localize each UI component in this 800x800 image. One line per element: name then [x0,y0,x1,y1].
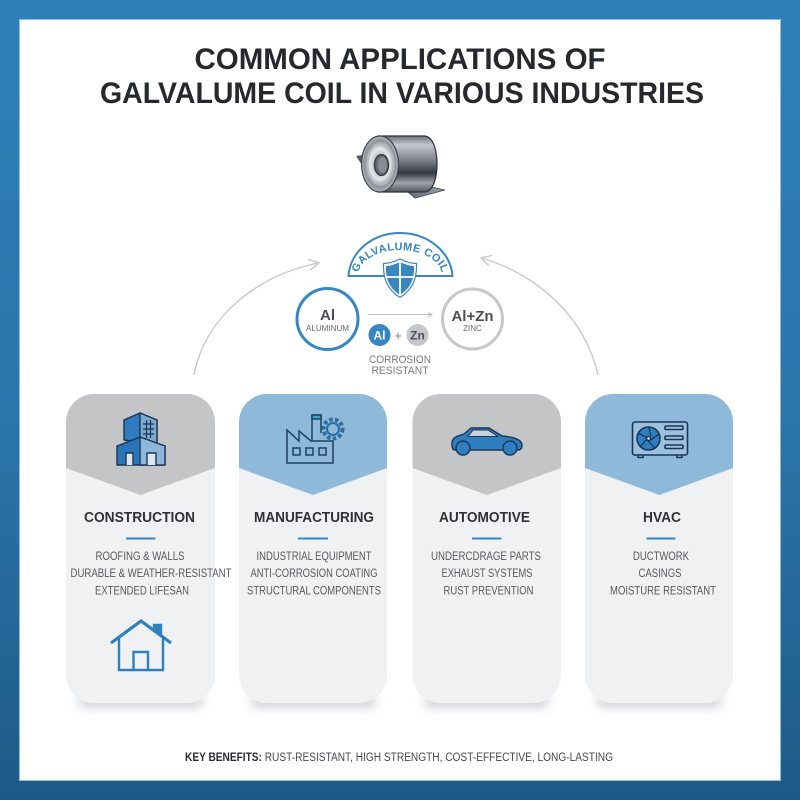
list: ANTI-CORROSION COATING [250,568,378,580]
icon: car [452,428,522,455]
corrosion resistant label: CORROSION [369,354,431,366]
list: INDUSTRIAL EQUIPMENT [256,551,372,563]
list: EXTENDED LIFESAN [95,586,189,598]
key benefits footer: KEY BENEFITS: RUST-RESISTANT, HIGH STRENGTH, COST-EFFECTIVE, LONG-LASTING [185,752,613,764]
list [247,551,381,598]
corrosion resistant label: RESISTANT [372,365,429,377]
list: ROOFING & WALLS [96,551,185,563]
aluminum circle: ALUMINUM [306,324,349,333]
list: STRUCTURAL COMPONENTS [247,586,381,598]
heading: MANUFACTURING [254,510,374,526]
icon: metal coil [356,136,445,198]
list: EXHAUST SYSTEMS [442,568,533,580]
zinc circle: Al+Zn [452,308,494,325]
icon: air conditioner [632,422,688,458]
heading: AUTOMOTIVE [439,510,530,526]
zinc circle [442,289,502,349]
arrow: curved left [194,263,318,375]
list: CASINGS [638,568,682,580]
aluminum circle [297,288,358,350]
icon: factory with gear [287,415,342,463]
alloy formula: Zn [410,328,425,342]
list [610,551,716,598]
list [431,551,541,598]
panel: automotive [412,394,561,708]
title: COMMON APPLICATIONS OF [194,43,606,76]
arrow: curved right [482,258,598,375]
list: DUCTWORK [633,551,689,563]
icon: house [111,621,171,670]
title [100,43,704,110]
galvalume coil badge: GALVALUME COIL [352,242,448,272]
alloy formula: + [394,328,402,343]
heading: HVAC [643,510,681,526]
panel: manufacturing [239,394,387,708]
list: RUST PREVENTION [444,586,534,598]
list [70,551,232,598]
aluminum circle: Al [320,307,335,324]
panel: construction [66,394,232,708]
icon: shield [383,259,417,298]
list: MOISTURE RESISTANT [610,586,716,598]
corrosion resistant label [369,354,431,377]
zinc circle: ZINC [463,324,482,333]
heading: CONSTRUCTION [84,510,195,526]
alloy formula [368,324,428,346]
list: UNDERCDRAGE PARTS [431,551,541,563]
icon: building [117,413,165,465]
panel: hvac [585,394,733,708]
title: GALVALUME COIL IN VARIOUS INDUSTRIES [100,77,704,110]
galvalume coil badge [347,232,454,298]
alloy formula: Al [374,328,386,342]
list: DURABLE & WEATHER-RESISTANT [70,568,232,580]
arrow: connector [368,312,432,316]
